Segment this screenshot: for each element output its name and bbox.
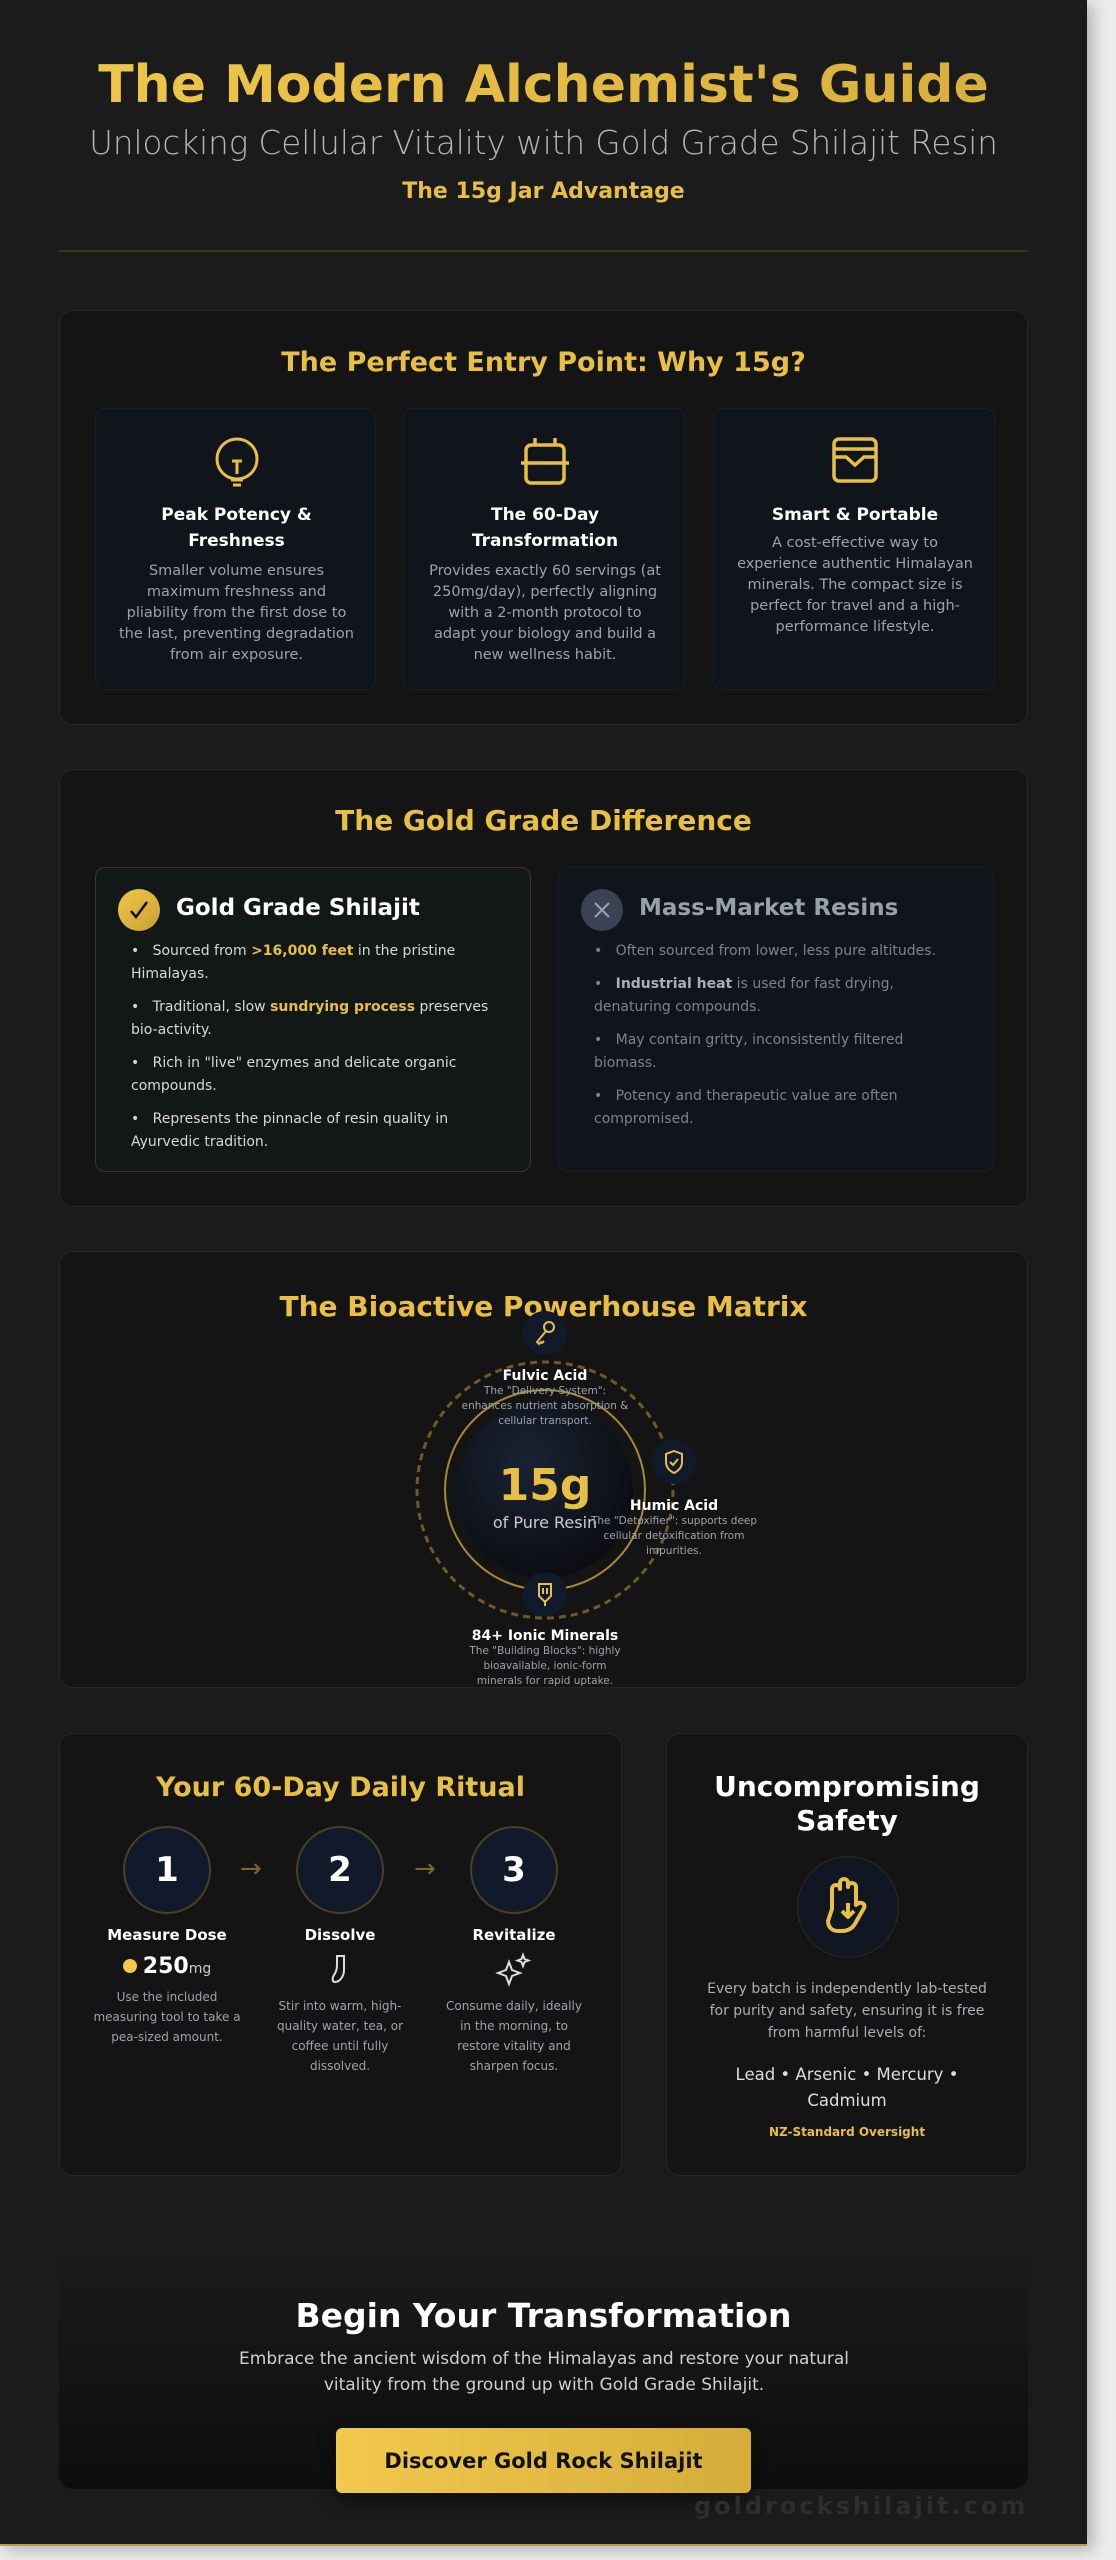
card title: The 60-Day — [491, 505, 599, 525]
step 2: 2 — [328, 1850, 352, 1890]
cta panel — [59, 2248, 1028, 2489]
center label — [493, 1460, 597, 1532]
label: fulvic: The "Delivery System": — [484, 1385, 606, 1397]
card text: pliability from the first dose to — [127, 605, 346, 621]
card text: maximum freshness and — [147, 584, 326, 600]
bullet list: • May contain gritty, inconsistently filtered biomass. — [594, 1032, 903, 1071]
step 1 text: 250mg — [143, 1954, 211, 1979]
cta heading: Begin Your Transformation — [295, 2296, 792, 2335]
card text — [119, 563, 354, 663]
step 3 text: Consume daily, ideally in the morning, to restore vitality and sharpen focus. — [446, 1999, 582, 2073]
card text: Provides exactly 60 servings (at 250mg/day), perfectly aligning with a 2-month protocol to adapt your biology and build a new wellness habit. — [429, 563, 661, 663]
card: gold grade — [95, 867, 531, 1172]
bullet list: • Potency and therapeutic value are often compromised. — [594, 1088, 898, 1127]
cta text: Embrace the ancient wisdom of the Himalayas and restore your natural vitality from the ground up with Gold Grade Shilajit. — [239, 2349, 849, 2395]
center label: of Pure Resin — [493, 1513, 597, 1532]
card title — [472, 505, 618, 551]
safety text: Every batch is independently lab-tested for purity and safety, ensuring it is free from harmful levels of: — [707, 1981, 987, 2041]
step 1 text: Measure Dose — [107, 1926, 227, 1944]
node: fulvic acid — [523, 1311, 567, 1355]
title: The Modern Alchemist's Guide — [98, 55, 989, 115]
card text: Smaller volume ensures — [149, 563, 324, 579]
heading: The Gold Grade Difference — [335, 804, 752, 837]
label: humic: cellular detoxification from — [604, 1530, 744, 1542]
card title: Transformation — [472, 531, 618, 551]
node: humic — [652, 1440, 696, 1484]
panel: safety — [666, 1733, 1028, 2176]
cta button: Discover Gold Rock Shilajit — [384, 2448, 703, 2472]
step 2 text — [277, 1926, 404, 2073]
step 3: 3 — [502, 1850, 526, 1890]
label: minerals: bioavailable, ionic-form — [483, 1660, 607, 1672]
card: mass market — [558, 867, 994, 1172]
step 1 text — [93, 1926, 241, 2044]
heading — [714, 1770, 980, 1837]
step 2 — [296, 1826, 384, 1914]
icon: bulb — [216, 438, 258, 486]
card title — [161, 505, 312, 551]
bullet list — [594, 943, 936, 1127]
diagram: rings — [416, 1360, 674, 1620]
label: minerals: 84+ Ionic Minerals — [472, 1628, 618, 1644]
label: fulvic: Fulvic Acid — [503, 1368, 587, 1384]
bullet list: • Sourced from >16,000 feet in the pristine Himalayas. — [131, 943, 455, 982]
panel: bioactive matrix — [59, 1251, 1028, 1688]
icon: calendar — [521, 438, 569, 485]
subtitle: Unlocking Cellular Vitality with Gold Grade Shilajit Resin — [89, 124, 998, 162]
icon: hand — [797, 1856, 899, 1958]
center label: 15g — [499, 1460, 591, 1511]
icon: x — [581, 889, 623, 931]
heading: Your 60-Day Daily Ritual — [156, 1772, 525, 1803]
step 1: 1 — [155, 1850, 179, 1890]
label: humic: impurities. — [646, 1545, 702, 1557]
card: peak potency — [95, 408, 376, 690]
step 2 text: Stir into warm, high-quality water, tea, or coffee until fully dissolved. — [277, 1999, 403, 2073]
cta button — [336, 2428, 751, 2493]
panel: gold grade difference — [59, 769, 1028, 1207]
label: fulvic: cellular transport. — [498, 1415, 592, 1427]
card: portable — [713, 408, 995, 690]
heading: Safety — [796, 1804, 898, 1837]
card text: the last, preventing degradation — [119, 626, 354, 642]
label: humic: The "Detoxifier": supports deep — [591, 1515, 757, 1527]
step 1 text: Use the included measuring tool to take a pea-sized amount. — [93, 1990, 241, 2044]
card text: A cost-effective way to experience authentic Himalayan minerals. The compact size is perfect for travel and a high-performance lifestyle. — [737, 535, 973, 635]
panel: daily ritual — [59, 1733, 622, 2176]
bullet list: • Represents the pinnacle of resin quality in Ayurvedic tradition. — [131, 1111, 448, 1150]
card title: Peak Potency & — [161, 505, 312, 525]
bullet list: • Rich in "live" enzymes and delicate organic compounds. — [131, 1055, 456, 1094]
icon: wallet — [832, 437, 878, 483]
bullet list: • Industrial heat is used for fast drying, denaturing compounds. — [594, 976, 894, 1015]
step 3 text: Revitalize — [472, 1926, 556, 1944]
bullet list — [131, 943, 488, 1150]
step 3 text — [446, 1926, 582, 2073]
card text: from air exposure. — [170, 647, 303, 663]
arrow: → — [240, 1854, 262, 1884]
heading: The Bioactive Powerhouse Matrix — [280, 1290, 807, 1323]
heading: Uncompromising — [714, 1770, 980, 1803]
heading: why 15g: The Perfect Entry Point: Why 15g? — [281, 347, 806, 378]
label: minerals — [469, 1628, 621, 1687]
tagline: The 15g Jar Advantage — [402, 179, 685, 204]
card: 60 day — [403, 408, 685, 690]
card heading: Gold Grade Shilajit — [176, 895, 420, 921]
card title: Freshness — [188, 531, 285, 551]
arrow: → — [414, 1854, 436, 1884]
step 1 — [123, 1826, 211, 1914]
label: fulvic: enhances nutrient absorption & — [462, 1400, 628, 1412]
label: minerals: The "Building Blocks": highly — [469, 1645, 621, 1657]
label: minerals: minerals for rapid uptake. — [477, 1675, 613, 1687]
step 3 — [470, 1826, 558, 1914]
bullet list: • Often sourced from lower, less pure altitudes. — [594, 943, 936, 959]
card title: Smart & Portable — [772, 505, 938, 525]
watermark: goldrockshilajit.com — [694, 2492, 1028, 2520]
card heading: Mass-Market Resins — [639, 895, 898, 921]
panel: why 15g — [59, 310, 1028, 725]
node: minerals — [523, 1572, 567, 1616]
step 2 text: Dissolve — [305, 1926, 375, 1944]
metals list: Lead • Arsenic • Mercury • Cadmium — [736, 2065, 958, 2110]
bullet list: • Traditional, slow sundrying process preserves bio-activity. — [131, 999, 488, 1038]
label: fulvic — [462, 1368, 628, 1427]
badge: NZ-Standard Oversight — [769, 2125, 925, 2139]
label: humic — [590, 1498, 757, 1557]
label: humic: Humic Acid — [630, 1498, 718, 1514]
icon: check — [118, 889, 160, 931]
